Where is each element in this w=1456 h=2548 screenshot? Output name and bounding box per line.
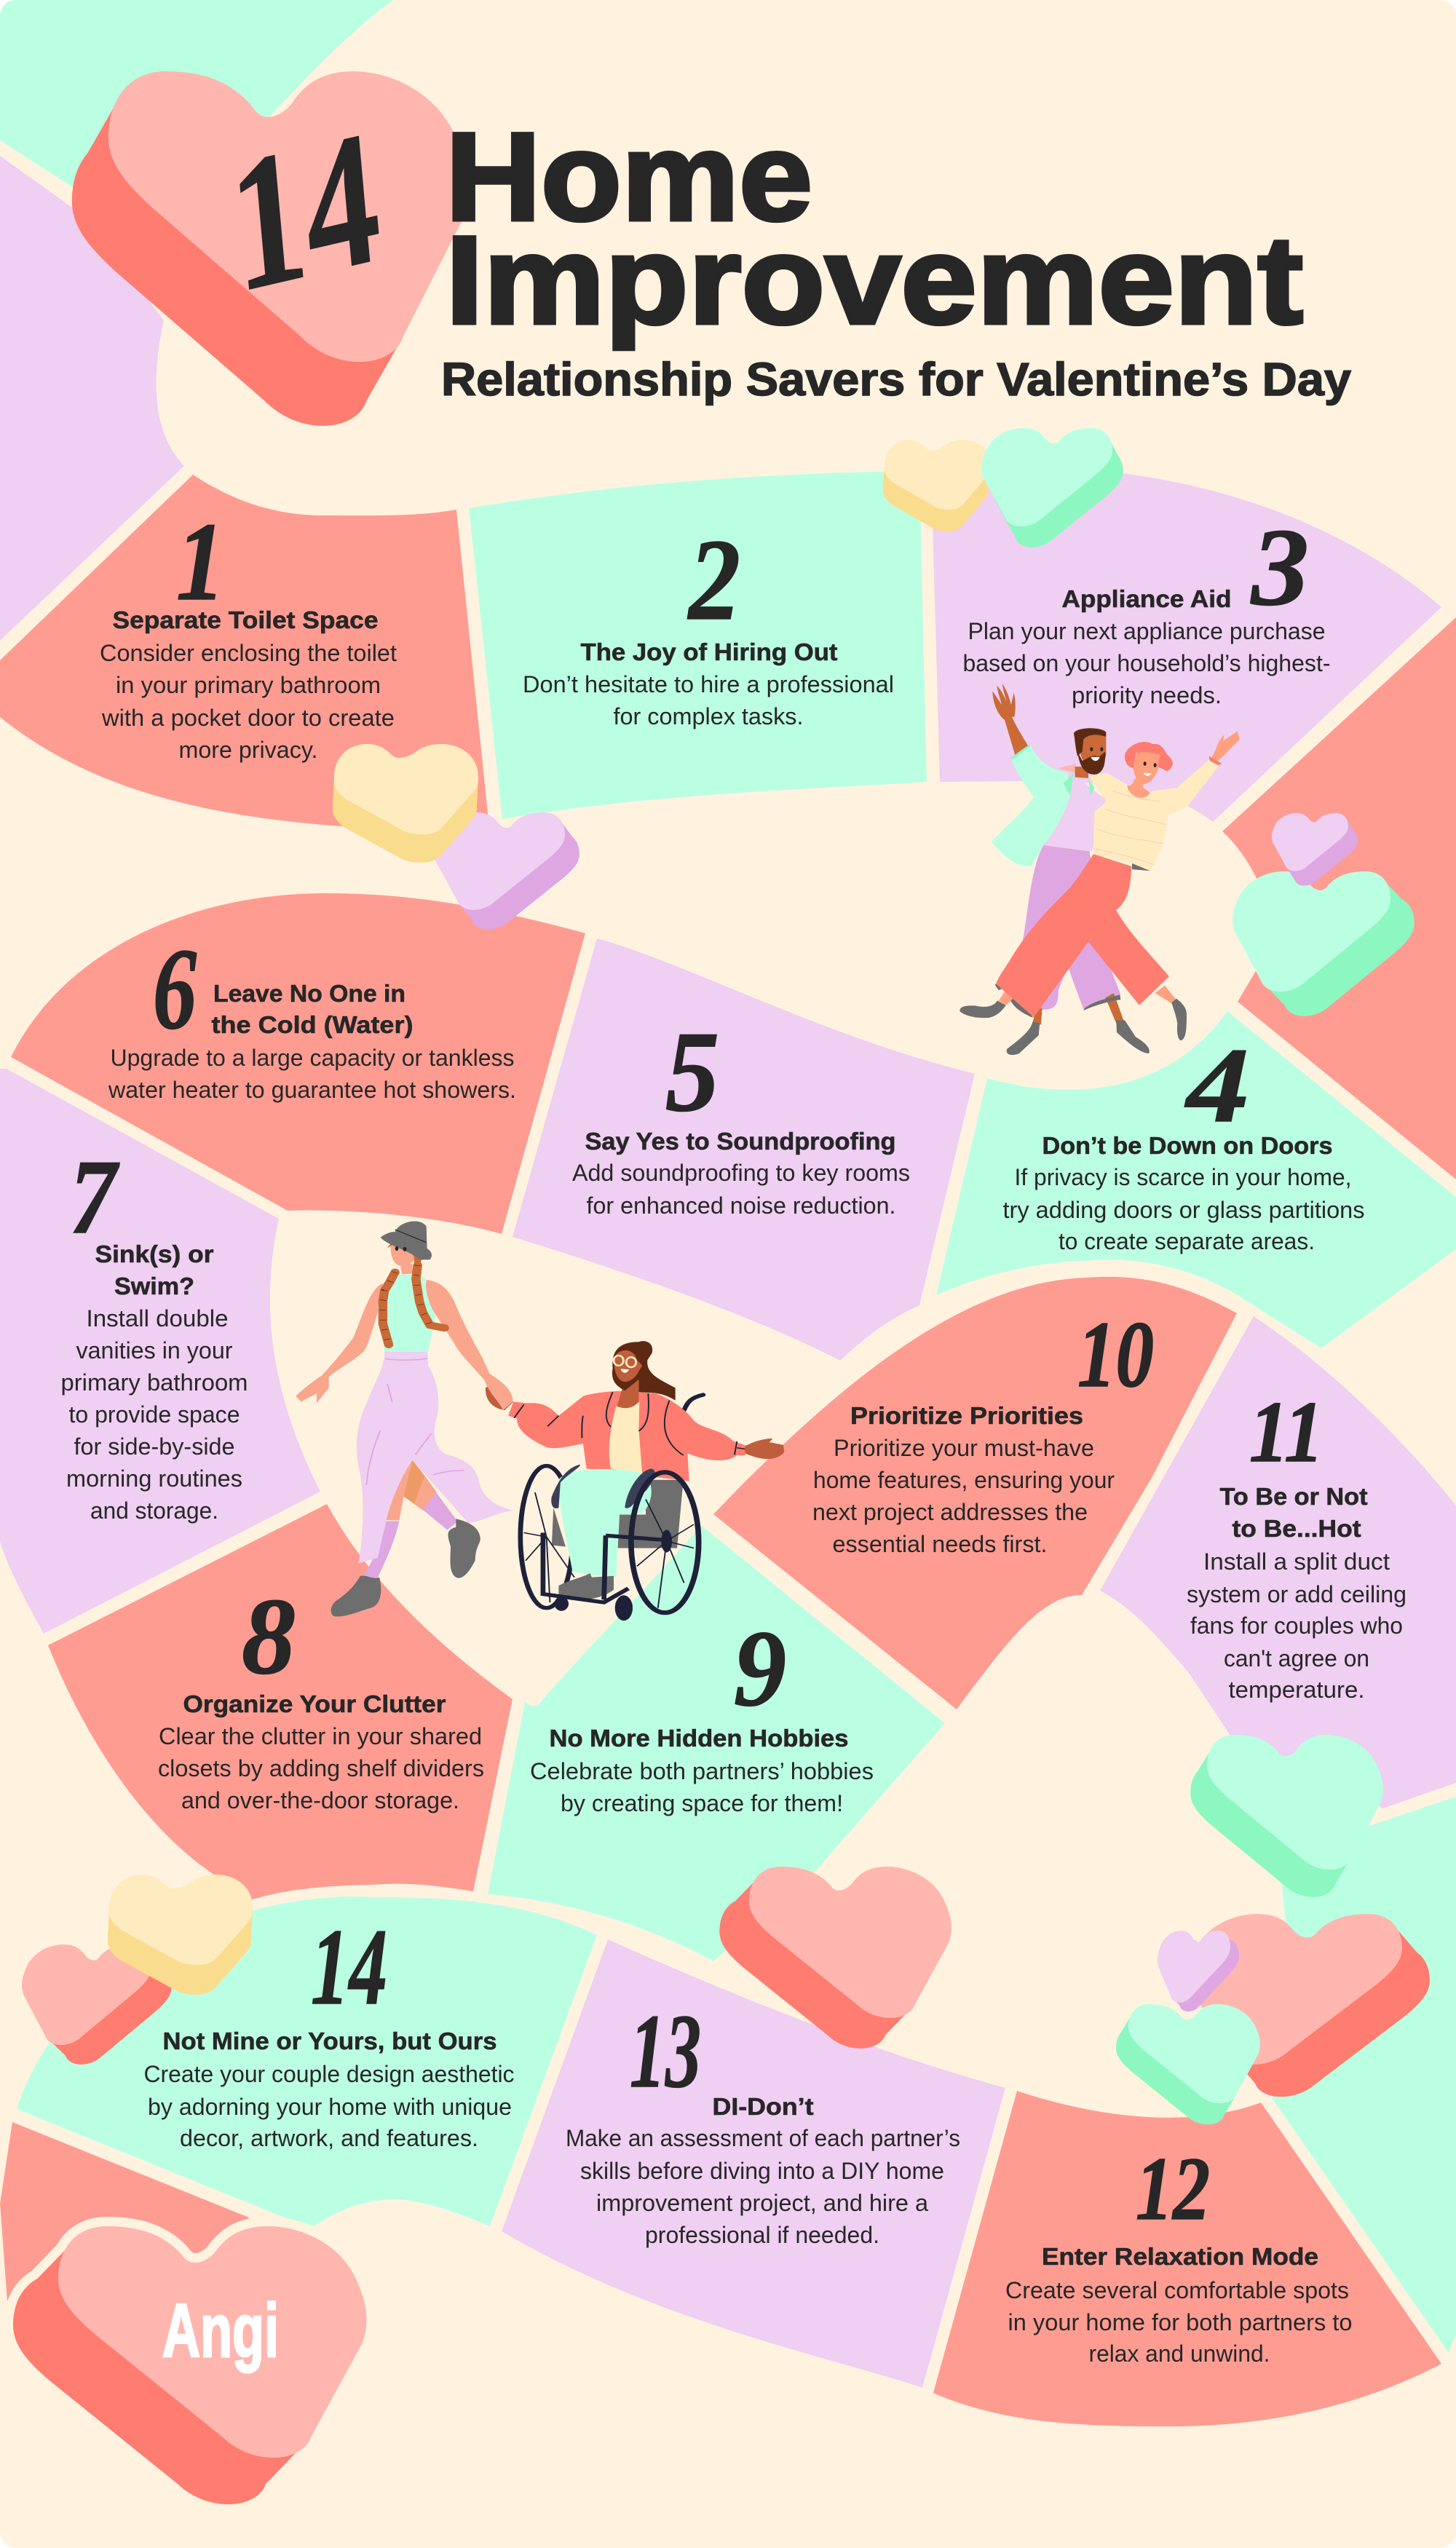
- mint trousers: [558, 1469, 652, 1578]
- woman's coral trousers: [996, 854, 1169, 1017]
- walking woman's top: [378, 1274, 436, 1352]
- body 10: [812, 1435, 1115, 1557]
- panel 8 shape: [48, 1504, 513, 1900]
- heading 12: Enter Relaxation Mode: [1042, 2243, 1318, 2270]
- body 11: Install a split duct: [1203, 1548, 1390, 1575]
- body 11: fans for couples who: [1190, 1613, 1403, 1639]
- woman's feet: [960, 984, 1187, 1040]
- body 4: [1003, 1164, 1364, 1254]
- number 12: 12: [1136, 2139, 1210, 2239]
- number 1: 1: [176, 500, 225, 624]
- decorative panel: right coral: [1222, 617, 1456, 1179]
- icon: mint heart panel 11: [1190, 1735, 1383, 1897]
- body 7: for side-by-side: [74, 1433, 234, 1460]
- heading 11: to Be...Hot: [1232, 1515, 1361, 1542]
- panel 5: Say Yes to Soundproofing: [513, 938, 975, 1361]
- body 1: in your primary bathroom: [116, 672, 381, 698]
- body 12: Create several comfortable spots: [1005, 2277, 1349, 2303]
- body 14: Create your couple design aesthetic: [144, 2061, 514, 2087]
- decorative panel: top-left purple: [0, 156, 184, 641]
- icon: small purple heart right: [1272, 813, 1358, 885]
- panel 11 shape: [1100, 1316, 1456, 1808]
- body 5: for enhanced noise reduction.: [587, 1192, 895, 1219]
- title: Home: [446, 107, 812, 247]
- subtitle: Relationship Savers for Valentine’s Day: [441, 353, 1351, 405]
- man's legs and feet: [1007, 845, 1150, 1055]
- panel 6 shape: [11, 893, 585, 1234]
- icon: purple heart panel 1: [434, 812, 579, 930]
- skirt folds: [366, 1358, 464, 1485]
- body 8: Clear the clutter in your shared: [159, 1723, 482, 1749]
- body 2: for complex tasks.: [613, 703, 804, 729]
- panel 14 shape: [17, 1896, 597, 2228]
- left wheel: [521, 1466, 574, 1608]
- icon: mint heart top: [981, 428, 1123, 547]
- heading 13: DI-Don’t: [712, 2093, 814, 2120]
- heading 6: Leave No One in: [213, 980, 405, 1007]
- body 4: to create separate areas.: [1059, 1228, 1315, 1254]
- man's torso and arm: [992, 684, 1107, 866]
- panel 10 shape: [713, 1277, 1237, 1709]
- panel 11: To Be or Not to Be...Hot: [1100, 1316, 1456, 1808]
- heading 7: Swim?: [114, 1273, 194, 1299]
- panel 14: Not Mine or Yours, but Ours: [17, 1896, 597, 2228]
- body 13: improvement project, and hire a: [596, 2190, 928, 2216]
- icon: yellow heart panel 14: [108, 1875, 253, 1995]
- icon: small purple heart bottom right: [1158, 1931, 1239, 2011]
- heading 14: Not Mine or Yours, but Ours: [163, 2027, 496, 2054]
- wheelchair frame and right wheel: [543, 1472, 699, 1621]
- body 7: primary bathroom: [61, 1369, 248, 1396]
- panel 3 shape: [931, 473, 1441, 822]
- body 14: [144, 2061, 514, 2151]
- man's head: [1074, 728, 1106, 775]
- panel 10: Prioritize Priorities: [713, 1277, 1237, 1709]
- body 4: try adding doors or glass partitions: [1003, 1197, 1364, 1223]
- walking woman's legs: [331, 1460, 480, 1616]
- body 10: next project addresses the: [812, 1499, 1088, 1525]
- body 7: [61, 1305, 248, 1524]
- body 5: [572, 1160, 910, 1219]
- body 7: vanities in your: [76, 1337, 233, 1364]
- icon: small mint heart bottom right: [1116, 2004, 1260, 2124]
- body 13: skills before diving into a DIY home: [580, 2158, 944, 2184]
- panel 6: Leave No One in the Cold (Water): [11, 893, 585, 1234]
- panel 12 shape: [933, 2091, 1441, 2426]
- panel 5 shape: [513, 938, 975, 1361]
- number 11: 11: [1249, 1383, 1324, 1480]
- panel 1 shape: [0, 475, 489, 829]
- jacket details: [514, 1392, 746, 1455]
- body 13: professional if needed.: [645, 2222, 879, 2248]
- body 12: in your home for both partners to: [1008, 2309, 1353, 2335]
- body 7: morning routines: [66, 1465, 242, 1492]
- wheelchair woman's head: [612, 1341, 676, 1408]
- body 9: Celebrate both partners’ hobbies: [530, 1758, 874, 1784]
- number 3: 3: [1250, 506, 1309, 628]
- body 9: by creating space for them!: [561, 1790, 843, 1816]
- body 1: more privacy.: [179, 737, 317, 763]
- heading 6: the Cold (Water): [211, 1011, 414, 1038]
- body 1: [100, 640, 397, 763]
- panel 7: Sink(s) or Swim?: [0, 1069, 320, 1634]
- illustration: walking woman and woman in wheelchair: [296, 1221, 784, 1621]
- body 3: based on your household’s highest-: [962, 650, 1331, 676]
- cream shirt: [609, 1402, 642, 1474]
- panel 1: Separate Toilet Space: [0, 475, 489, 829]
- panel 12: Enter Relaxation Mode: [933, 2091, 1441, 2426]
- cushions: [551, 1465, 655, 1508]
- heading 3: Appliance Aid: [1061, 585, 1232, 612]
- woman's torso and arms: [1088, 731, 1240, 871]
- body 10: Prioritize your must-have: [834, 1435, 1094, 1461]
- title number 14: 14: [208, 93, 400, 331]
- body 4: If privacy is scarce in your home,: [1015, 1164, 1351, 1190]
- body 7: and storage.: [90, 1497, 218, 1524]
- body 14: by adorning your home with unique: [148, 2094, 512, 2120]
- heading 10: Prioritize Priorities: [850, 1402, 1083, 1429]
- decorative panel: bottom-left coral: [0, 2122, 249, 2301]
- number 14: 14: [311, 1907, 387, 2027]
- body 12: [1005, 2277, 1353, 2367]
- wheelchair back and seat: [552, 1395, 703, 1548]
- body 8: and over-the-door storage.: [181, 1787, 459, 1813]
- heading 11: [1220, 1483, 1367, 1542]
- panel 13: DI-Don't: [502, 1939, 1005, 2388]
- icon: coral heart center: [719, 1867, 951, 2049]
- Angi logo: Angi: [162, 2289, 279, 2373]
- title: [446, 107, 1303, 350]
- body 2: Don’t hesitate to hire a professional: [523, 671, 894, 697]
- panel 4: Don't be Down on Doors: [936, 1011, 1456, 1348]
- number 4: 4: [1184, 1026, 1249, 1144]
- icon: yellow heart top: [883, 440, 990, 531]
- panel 2: The Joy of Hiring Out: [469, 471, 927, 819]
- body 9: [530, 1758, 874, 1816]
- body 11: can't agree on: [1224, 1645, 1369, 1671]
- heading 8: Organize Your Clutter: [183, 1690, 446, 1717]
- body 6: Upgrade to a large capacity or tankless: [111, 1045, 514, 1071]
- panel 8: Organize Your Clutter: [48, 1504, 513, 1900]
- icon: yellow heart panel 1: [333, 744, 478, 863]
- panel 4 shape: [936, 1011, 1456, 1348]
- heading 7: [95, 1241, 214, 1299]
- body 11: temperature.: [1229, 1677, 1364, 1703]
- walking woman's skirt: [357, 1352, 513, 1564]
- title: Improvement: [446, 210, 1303, 350]
- body 1: Consider enclosing the toilet: [100, 640, 397, 666]
- body 13: [566, 2125, 960, 2248]
- body 6: [108, 1045, 516, 1103]
- body 2: [523, 671, 894, 729]
- body 11: system or add ceiling: [1187, 1581, 1406, 1607]
- body 7: Install double: [86, 1305, 229, 1332]
- wheelchair woman's jacket: [508, 1391, 747, 1481]
- body 1: with a pocket door to create: [101, 705, 395, 731]
- body 10: home features, ensuring your: [813, 1467, 1115, 1493]
- panel 2 shape: [469, 471, 927, 819]
- icon: Angi logo heart: [13, 2226, 367, 2504]
- icon: small coral heart left: [22, 1944, 172, 2065]
- number 2: 2: [687, 515, 740, 644]
- heading 1: Separate Toilet Space: [112, 606, 379, 633]
- number 13: 13: [630, 1993, 701, 2110]
- number 5: 5: [665, 1008, 719, 1136]
- walking woman's clasped hand: [484, 1380, 513, 1410]
- decorative panel: top-left mint: [0, 0, 393, 218]
- icon: coral heart right: [1189, 1914, 1430, 2097]
- body 8: [158, 1723, 484, 1813]
- number 7: 7: [70, 1138, 119, 1256]
- body 14: decor, artwork, and features.: [180, 2125, 478, 2151]
- number 10: 10: [1077, 1302, 1154, 1407]
- woman's head: [1125, 742, 1173, 784]
- walking woman's head and hat: [381, 1221, 432, 1274]
- heading 11: To Be or Not: [1220, 1483, 1367, 1510]
- heading 7: Sink(s) or: [95, 1241, 214, 1267]
- body 8: closets by adding shelf dividers: [158, 1755, 484, 1781]
- panel 3: Appliance Aid: [931, 473, 1441, 822]
- body 13: Make an assessment of each partner’s: [566, 2125, 960, 2151]
- heading 4: Don’t be Down on Doors: [1042, 1132, 1332, 1159]
- body 6: water heater to guarantee hot showers.: [108, 1077, 516, 1103]
- wheelchair woman's hands: [486, 1387, 784, 1459]
- body 3: [962, 618, 1331, 708]
- icon: large title heart: [72, 71, 468, 426]
- panel 9 shape: [488, 1525, 945, 1961]
- panel 13 shape: [502, 1939, 1005, 2388]
- icon: mint heart right: [1233, 871, 1415, 1016]
- walking woman's arms: [296, 1280, 513, 1410]
- illustration: dancing couple: [960, 684, 1240, 1055]
- body 3: priority needs.: [1072, 682, 1222, 708]
- body 7: to provide space: [68, 1401, 240, 1428]
- heading 6: [211, 980, 414, 1038]
- heading 2: The Joy of Hiring Out: [581, 638, 838, 665]
- body 12: relax and unwind.: [1089, 2341, 1270, 2367]
- body 3: Plan your next appliance purchase: [968, 618, 1325, 644]
- number 9: 9: [734, 1608, 786, 1729]
- heading 9: No More Hidden Hobbies: [549, 1725, 849, 1752]
- number 8: 8: [242, 1576, 296, 1697]
- wheelchair shoes: [558, 1573, 614, 1599]
- body 5: Add soundproofing to key rooms: [572, 1160, 910, 1186]
- heading 5: Say Yes to Soundproofing: [585, 1128, 895, 1155]
- body 11: [1187, 1548, 1406, 1703]
- braids: [383, 1265, 445, 1345]
- panel 9: No More Hidden Hobbies: [488, 1525, 945, 1961]
- panel 7 shape: [0, 1069, 320, 1634]
- decorative panel: bottom-right mint: [1272, 1797, 1456, 2353]
- body 10: essential needs first.: [833, 1531, 1047, 1557]
- number 6: 6: [153, 924, 197, 1053]
